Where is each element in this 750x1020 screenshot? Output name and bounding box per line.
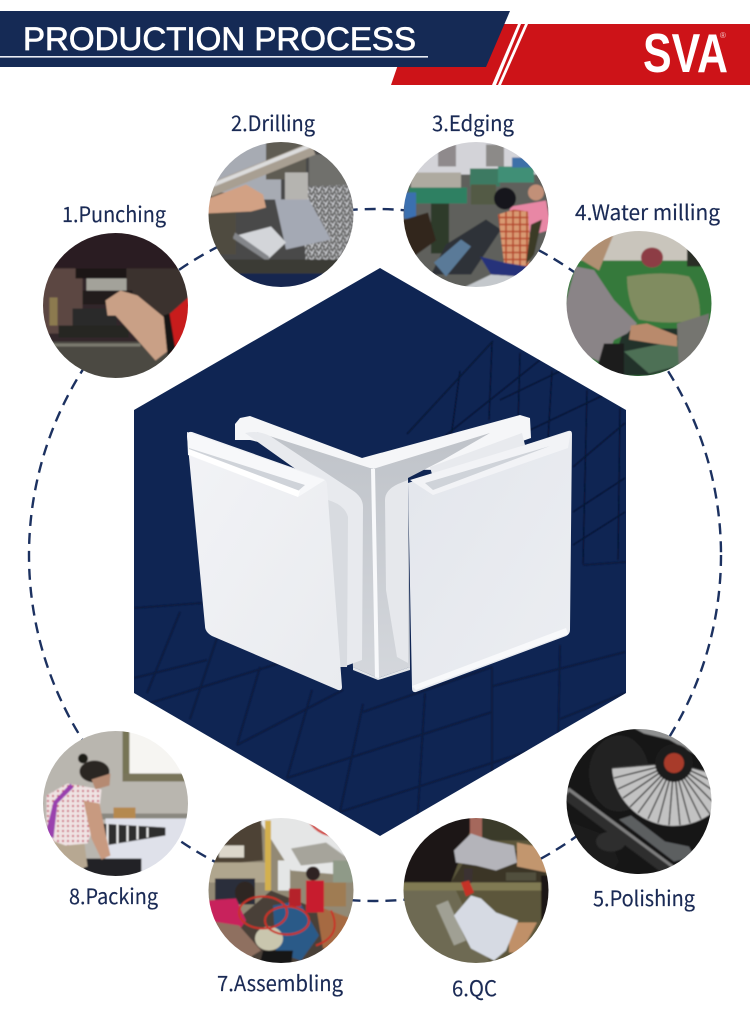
label: 8.Packing: 8.Packing: [69, 881, 158, 911]
photo 3: edging: [401, 140, 551, 290]
navy title ribbon: [0, 11, 510, 67]
label: 1.Punching: 1.Punching: [62, 199, 166, 229]
red ribbon with logo: SVA: [643, 22, 728, 84]
label: 5.Polishing: 5.Polishing: [593, 883, 695, 913]
right plate: [408, 431, 572, 692]
product: glass clamp: [187, 415, 572, 692]
photo 2: drilling: [208, 142, 354, 287]
left plate: [187, 432, 342, 690]
photo 7: assembling: [206, 816, 356, 966]
header banner: [0, 11, 750, 85]
photo 1: punching: [40, 230, 192, 382]
back body: [235, 415, 531, 470]
red ribbon with logo: [391, 22, 750, 85]
title: PRODUCTION PROCESS: [23, 21, 416, 57]
dashed connector ring: [29, 209, 721, 901]
photo 5: polishing: [566, 729, 712, 874]
photo 6: QC: [401, 812, 551, 966]
label: 7.Assembling: 7.Assembling: [217, 968, 343, 998]
label: 2.Drilling: 2.Drilling: [231, 108, 315, 138]
photo 4: water milling: [564, 228, 717, 378]
label: 4.Water milling: 4.Water milling: [575, 197, 720, 227]
hexagon background: [130, 260, 630, 840]
label: 6.QC: 6.QC: [452, 973, 497, 1003]
photo 8: packing: [40, 728, 192, 880]
red ribbon with logo: ®: [720, 31, 726, 40]
label: 3.Edging: 3.Edging: [432, 108, 514, 138]
